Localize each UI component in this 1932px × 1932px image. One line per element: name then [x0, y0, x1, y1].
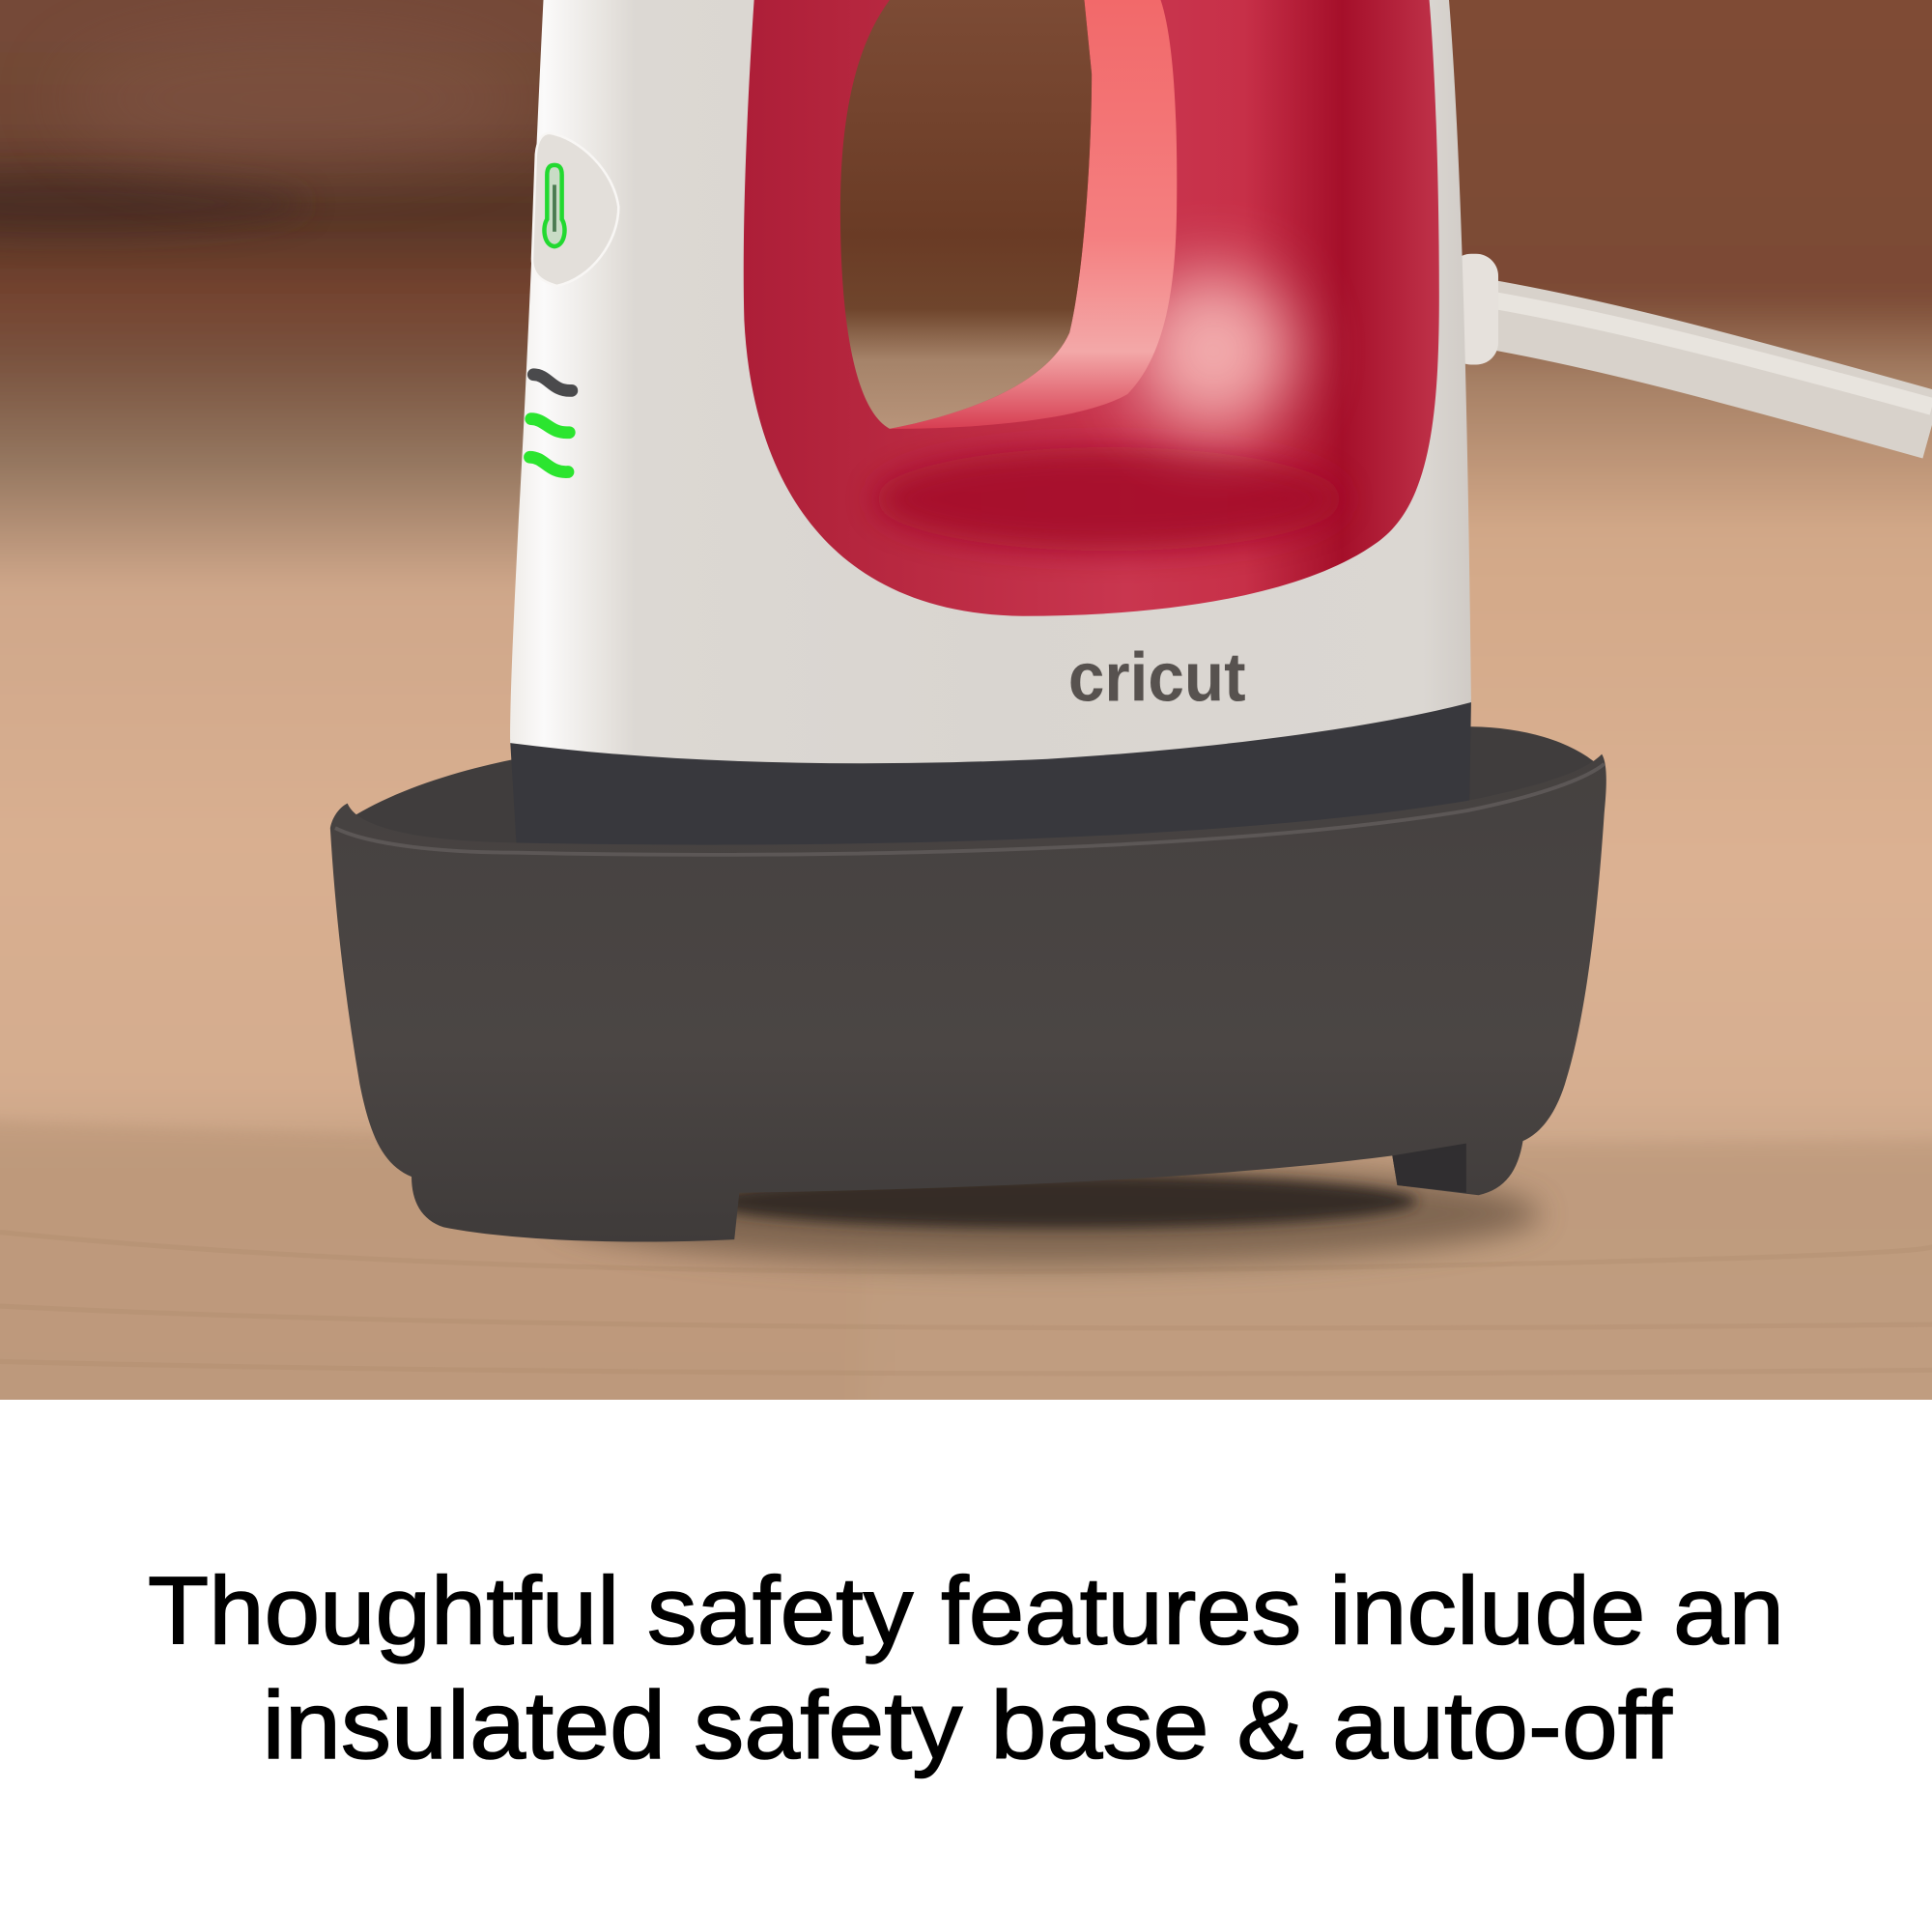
cricut logo: cricut: [1068, 639, 1246, 717]
heat level indicators: [529, 375, 572, 472]
blurred background and table: [0, 0, 1932, 1523]
handle opening: [840, 0, 1092, 429]
iron soleplate band: [510, 699, 1471, 827]
level 3 on: [529, 457, 568, 472]
caption line 1: Thoughtful safety features include an: [148, 1558, 1784, 1665]
wood grain: [0, 1233, 1932, 1374]
base foot shading: [1392, 1144, 1466, 1193]
photo: iron on safety base: [0, 0, 1932, 1523]
power cord: [1449, 254, 1932, 425]
caption: [148, 1558, 1784, 1779]
temperature button: [532, 133, 618, 286]
iron: [510, 0, 1471, 863]
icon: thermometer: [544, 165, 564, 246]
red handle: [744, 0, 1439, 616]
safety base back interior: [355, 726, 1594, 842]
level 2 on: [531, 419, 569, 433]
caption line 2: insulated safety base & auto-off: [263, 1672, 1672, 1779]
safety base front: [330, 754, 1606, 1242]
handle inner wall: [890, 0, 1177, 429]
iron white body: [510, 0, 1471, 763]
base rim highlight: [335, 764, 1605, 855]
base front wall: [330, 754, 1606, 1242]
contact shadow under base: [554, 1162, 1540, 1265]
level 1 off: [533, 375, 572, 390]
